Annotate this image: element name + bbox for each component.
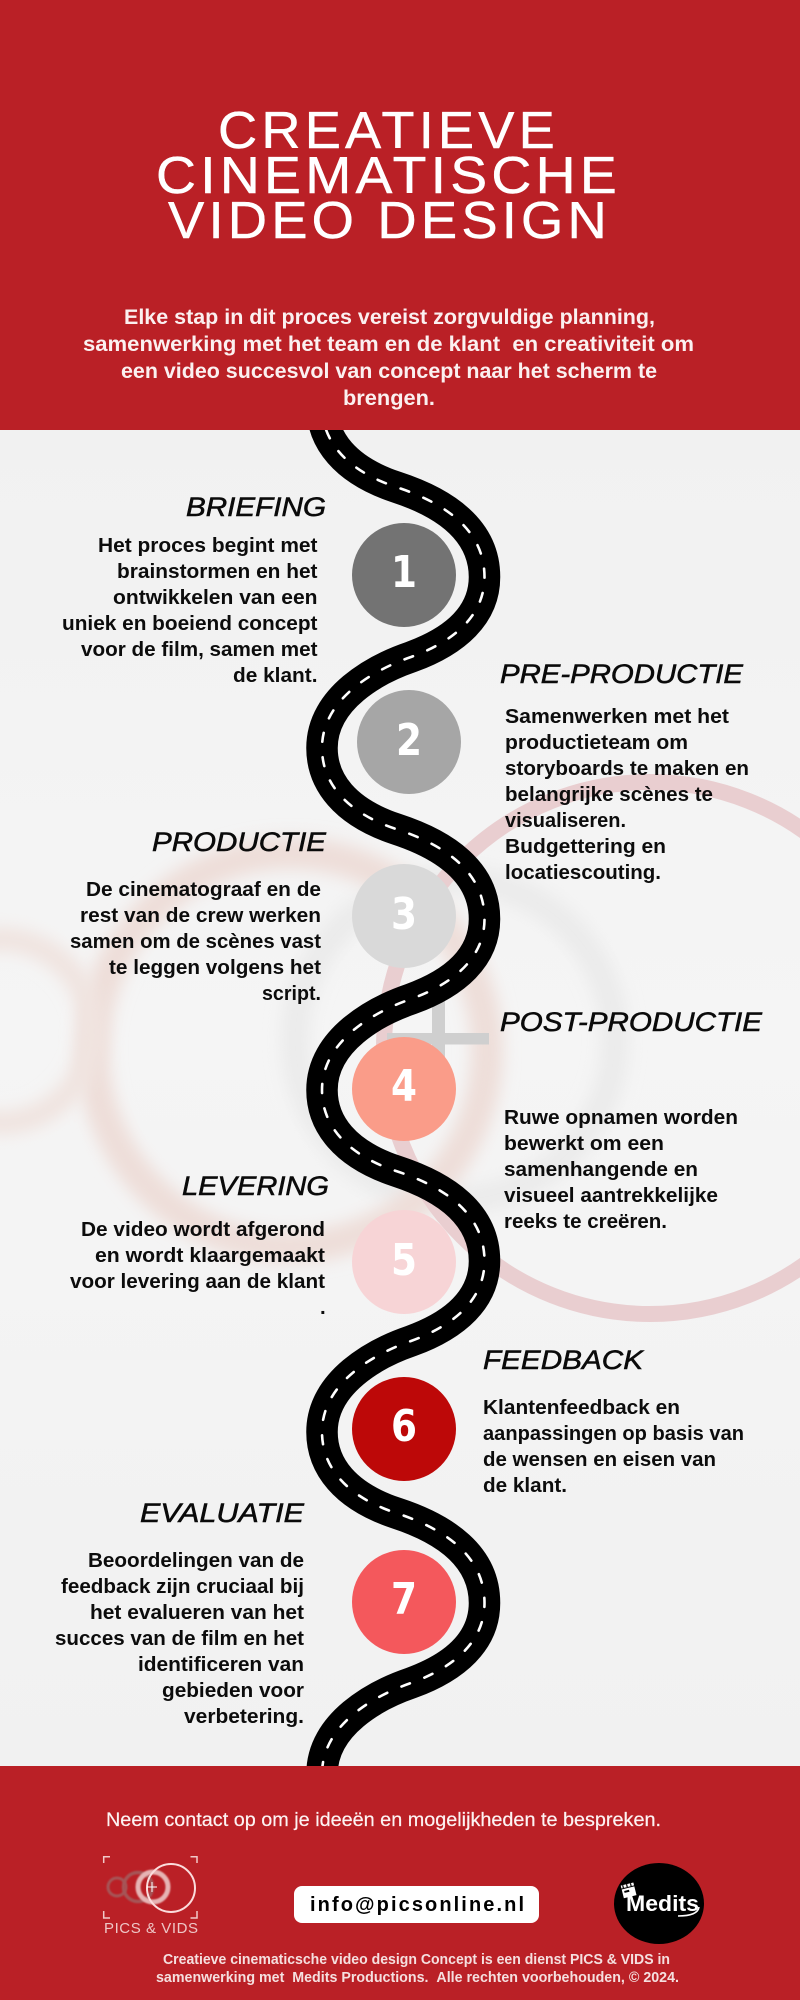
logo: medits	[614, 1863, 704, 1944]
text: evaluatie: succes van de film en het	[55, 1627, 304, 1650]
text: post-productie	[504, 1106, 738, 1233]
panel: footer	[0, 1766, 800, 2000]
number badge 4: 4	[391, 1061, 417, 1112]
panel: step 6 feedback	[352, 1345, 744, 1497]
number badge 4	[352, 1037, 456, 1141]
logo: medits: Medits	[626, 1891, 699, 1916]
text: levering: De video wordt afgerond	[81, 1218, 325, 1241]
heading: productie: PRODUCTIE	[152, 827, 327, 857]
panel: step 3 productie	[70, 827, 456, 1005]
text: briefing	[62, 534, 318, 687]
panel: step 1 briefing	[62, 492, 456, 687]
background watermark: camera rings	[0, 782, 800, 1314]
header background	[0, 0, 800, 430]
text: productie: De cinematograaf en de	[86, 878, 321, 901]
page background	[0, 430, 800, 1766]
text: evaluatie: feedback zijn cruciaal bij	[61, 1575, 304, 1598]
number badge 5: 5	[391, 1235, 417, 1286]
number badge 2	[357, 690, 461, 794]
text: evaluatie: identificeren van	[138, 1653, 304, 1676]
number badge 5	[352, 1210, 456, 1314]
text: feedback: aanpassingen op basis van	[483, 1422, 744, 1445]
number badge 7: 7	[391, 1574, 417, 1625]
text: evaluatie: gebieden voor	[162, 1679, 304, 1702]
text: briefing: voor de film, samen met	[81, 638, 318, 661]
text: evaluatie	[55, 1549, 304, 1728]
text: feedback: Klantenfeedback en	[483, 1396, 680, 1419]
panel: step 4 post-productie	[352, 1007, 763, 1233]
email pill: info@picsonline.nl	[310, 1894, 524, 1916]
heading: levering: LEVERING	[182, 1171, 329, 1201]
text: feedback: de wensen en eisen van	[483, 1448, 716, 1471]
email pill	[294, 1886, 539, 1923]
text: levering: .	[320, 1296, 326, 1319]
heading: evaluatie: EVALUATIE	[140, 1498, 305, 1528]
logo: pics and vids: PICS & VIDS	[104, 1920, 198, 1937]
number badge 3: 3	[391, 889, 417, 940]
number badge 2: 2	[396, 715, 422, 766]
text: pre-productie	[505, 705, 749, 884]
text: pre-productie: productieteam om	[505, 731, 688, 754]
title: CINEMATISCHE	[156, 147, 621, 205]
text: post-productie: reeks te creëren.	[504, 1210, 667, 1233]
text: pre-productie: Budgettering en	[505, 835, 666, 858]
text: pre-productie: locatiescouting.	[505, 861, 661, 884]
number badge 6: 6	[391, 1401, 417, 1452]
number badge 1: 1	[391, 547, 417, 598]
intro paragraph: een video succesvol van concept naar het scherm te	[121, 360, 657, 383]
text: productie: script.	[262, 982, 321, 1005]
text: briefing: ontwikkelen van een	[113, 586, 318, 609]
text: levering: voor levering aan de klant	[70, 1270, 325, 1293]
text: levering: en wordt klaargemaakt	[95, 1244, 325, 1267]
text: productie: te leggen volgens het	[109, 956, 321, 979]
text: post-productie: visueel aantrekkelijke	[504, 1184, 718, 1207]
text: productie: rest van de crew werken	[80, 904, 321, 927]
heading: briefing: BRIEFING	[186, 492, 326, 522]
title: CREATIEVE	[218, 102, 559, 160]
text: productie: samen om de scènes vast	[70, 930, 321, 953]
footer background	[0, 1766, 800, 2000]
text: feedback: de klant.	[483, 1474, 567, 1497]
text: post-productie: Ruwe opnamen worden	[504, 1106, 738, 1129]
number badge 3	[352, 864, 456, 968]
text: evaluatie: het evalueren van het	[90, 1601, 304, 1624]
text: briefing: brainstormen en het	[117, 560, 318, 583]
number badge 6	[352, 1377, 456, 1481]
copyright text: samenwerking met Medits Productions. Alle rechten voorbehouden, © 2024.	[156, 1970, 679, 1986]
heading: post-productie: POST-PRODUCTIE	[500, 1007, 763, 1037]
text: briefing: de klant.	[233, 664, 318, 687]
panel: step 2 pre-productie	[357, 659, 749, 884]
text: post-productie: samenhangende en	[504, 1158, 698, 1181]
copyright text: Creatieve cinematicsche video design Concept is een dienst PICS & VIDS in	[163, 1952, 670, 1968]
copyright text	[156, 1952, 679, 1986]
heading: feedback: FEEDBACK	[483, 1345, 644, 1375]
panel: step 7 evaluatie	[55, 1498, 456, 1728]
title	[156, 102, 621, 250]
text: productie	[70, 878, 321, 1005]
text: pre-productie: visualiseren.	[505, 809, 626, 832]
contact line: Neem contact op om je ideeën en mogelijkheden te bespreken.	[106, 1810, 661, 1831]
panel: step 5 levering	[70, 1171, 456, 1319]
text: pre-productie: Samenwerken met het	[505, 705, 729, 728]
text: levering	[70, 1218, 326, 1319]
text: evaluatie: Beoordelingen van de	[88, 1549, 304, 1572]
text: post-productie: bewerkt om een	[504, 1132, 664, 1155]
winding road	[322, 406, 484, 1774]
intro paragraph	[83, 306, 694, 410]
intro paragraph: Elke stap in dit proces vereist zorgvuldige planning,	[124, 306, 655, 329]
heading: pre-productie: PRE-PRODUCTIE	[500, 659, 744, 689]
text: pre-productie: storyboards te maken en	[505, 757, 749, 780]
intro paragraph: samenwerking met het team en de klant en creativiteit om	[83, 333, 694, 356]
text: evaluatie: verbetering.	[184, 1705, 304, 1728]
intro paragraph: brengen.	[343, 387, 435, 410]
text: briefing: uniek en boeiend concept	[62, 612, 318, 635]
text: briefing: Het proces begint met	[98, 534, 318, 557]
title: VIDEO DESIGN	[168, 192, 611, 250]
panel: header	[0, 0, 800, 430]
number badge 1	[352, 523, 456, 627]
logo: pics and vids	[104, 1857, 198, 1937]
text: pre-productie: belangrijke scènes te	[505, 783, 713, 806]
number badge 7	[352, 1550, 456, 1654]
text: feedback	[483, 1396, 744, 1497]
